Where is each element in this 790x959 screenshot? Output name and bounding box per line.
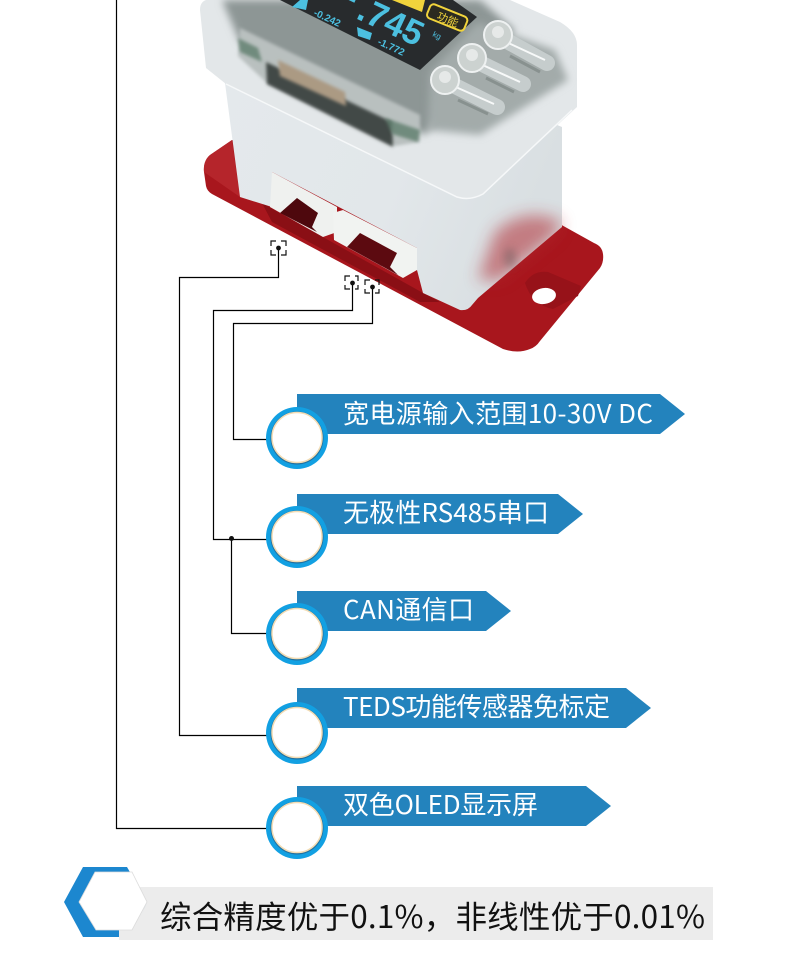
bottom accuracy banner bbox=[64, 867, 713, 940]
callout 3: CAN bbox=[266, 590, 511, 665]
callout 4: TEDS: TEDS功能传感器免标定 bbox=[343, 687, 610, 724]
bottom accuracy banner: 综合精度优于0.1%，非线性优于0.01% bbox=[160, 892, 705, 938]
OLED screen: -0.242 bbox=[312, 8, 342, 30]
callout 1: power input bbox=[266, 394, 685, 469]
OLED screen: -1.772 bbox=[376, 37, 406, 59]
callout 5: OLED bbox=[266, 785, 611, 859]
circuit board inside lid bbox=[222, 0, 568, 147]
callout 5: OLED: 双色OLED显示屏 bbox=[343, 785, 538, 822]
callout 2: RS485: 无极性RS485串口 bbox=[343, 493, 549, 530]
connector one bbox=[270, 172, 337, 237]
red mounting plate bbox=[204, 140, 603, 352]
shaded plate strip below connectors bbox=[262, 203, 440, 302]
yellow status tags bbox=[392, 0, 425, 12]
callout leader lines bbox=[116, 0, 372, 828]
target marker: power port bbox=[365, 280, 379, 293]
connector two bbox=[333, 210, 417, 278]
OLED screen bbox=[280, 0, 477, 70]
mounting hole bbox=[525, 272, 581, 309]
callout 4: TEDS bbox=[266, 687, 651, 764]
callout 2: RS485 bbox=[266, 493, 583, 568]
target marker: serial port bbox=[345, 276, 358, 289]
three clear buttons bbox=[431, 21, 547, 114]
junction dot bbox=[229, 536, 234, 541]
device body bbox=[225, 60, 562, 310]
OLED screen: 功能 bbox=[435, 9, 461, 30]
OLED screen: kg bbox=[431, 30, 443, 41]
callout 1: power input: 宽电源输入范围10-30V DC bbox=[343, 394, 653, 431]
red glow through frosted body bbox=[478, 215, 562, 280]
target marker: TEDS bbox=[271, 241, 286, 255]
callout 3: CAN: CAN通信口 bbox=[343, 590, 474, 627]
translucent lid bbox=[200, 0, 577, 198]
product photo: sensor transmitter module bbox=[200, 0, 603, 351]
icon: blue hexagon bbox=[64, 867, 147, 937]
